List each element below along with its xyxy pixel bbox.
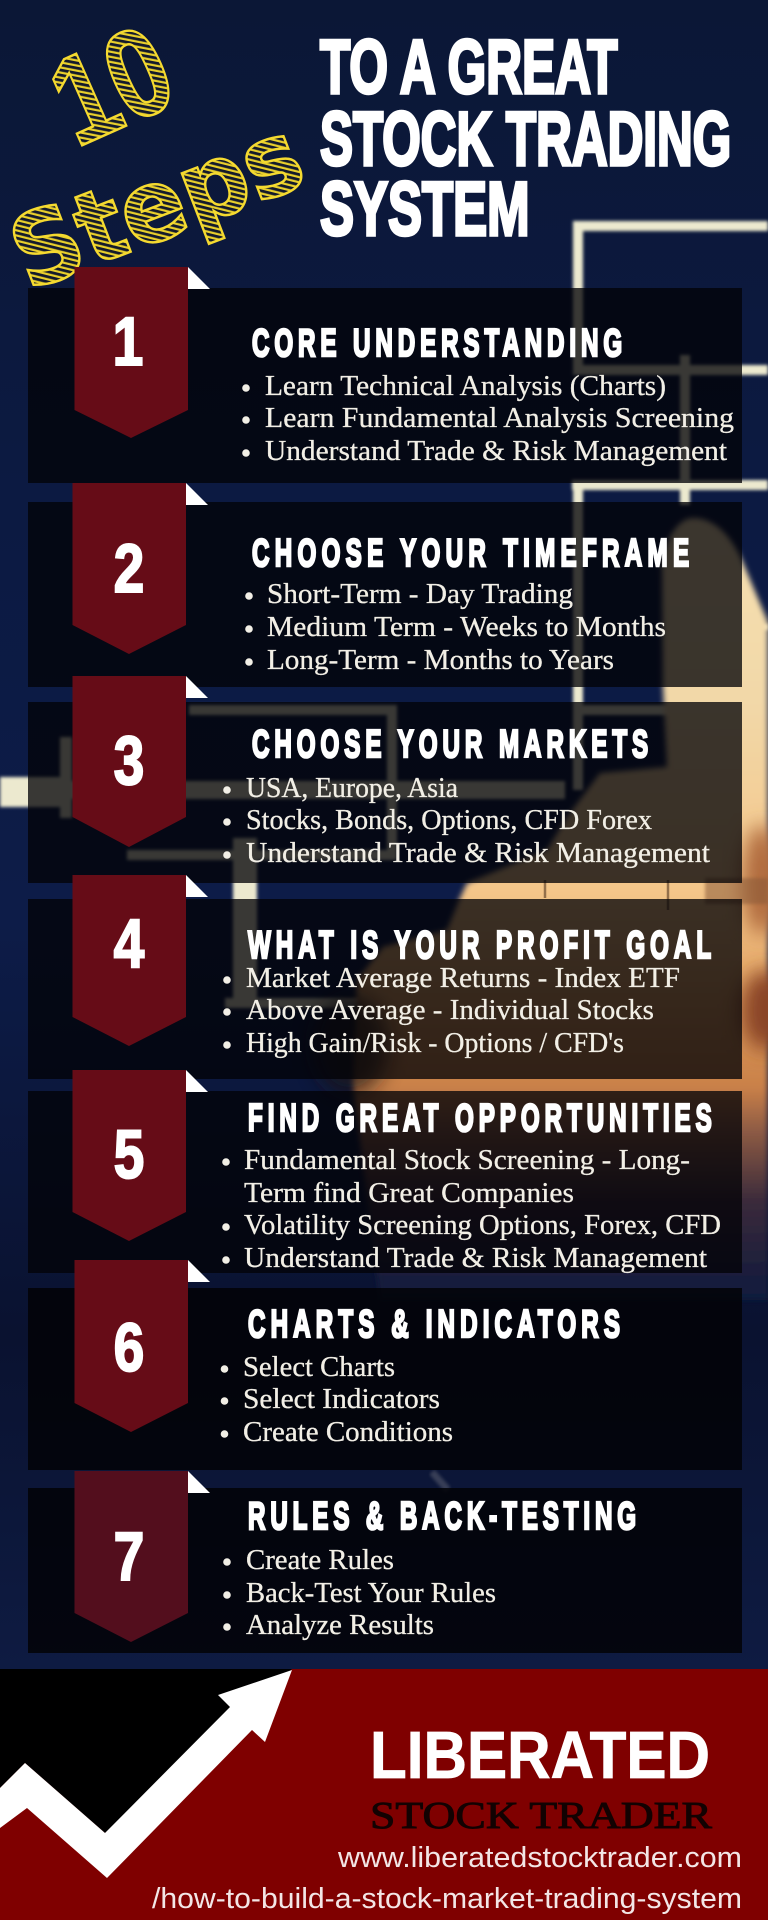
panel 1 bullet list: Understand Trade & Risk Management xyxy=(265,435,727,467)
panel: step 1 xyxy=(28,288,742,483)
panel 3 bullet list xyxy=(223,772,710,869)
panel 6 bullet list: Select Indicators xyxy=(243,1383,440,1415)
panel 1 heading: CORE UNDERSTANDING xyxy=(252,321,622,364)
panel 4 bullet list: High Gain/Risk - Options / CFD's xyxy=(246,1027,624,1059)
panel 5 bullet list: Fundamental Stock Screening - Long- xyxy=(244,1144,690,1176)
panel: step 2 xyxy=(28,502,742,687)
panel 3 bullet list: Understand Trade & Risk Management xyxy=(246,837,710,869)
title xyxy=(320,25,731,252)
panel 3 bullet list: USA, Europe, Asia xyxy=(246,772,458,804)
panel: step 4 xyxy=(28,899,742,1079)
panel 4 bullet list: Market Average Returns - Index ETF xyxy=(246,962,680,994)
panel 5 bullet list xyxy=(222,1144,721,1274)
panel 2 bullet list: Long-Term - Months to Years xyxy=(267,644,614,676)
panel 7 bullet list: Analyze Results xyxy=(246,1609,434,1641)
icon: rising white arrow xyxy=(0,1670,292,1878)
panel 2 bullet list xyxy=(245,578,666,676)
ribbon: step 4: 4 xyxy=(114,905,145,982)
hand-lettered "10 Steps": Steps xyxy=(0,96,319,313)
ribbon: step 1: 1 xyxy=(113,303,143,380)
title: SYSTEM xyxy=(320,167,530,252)
panel 5 heading: FIND GREAT OPPORTUNITIES xyxy=(248,1096,712,1139)
panel 6 bullet list: Select Charts xyxy=(243,1351,395,1383)
website URL: www.liberatedstocktrader.com xyxy=(337,1842,742,1874)
ribbon: step 2: 2 xyxy=(114,530,144,607)
panel: step 5 xyxy=(28,1091,742,1274)
ribbon: step 7: 7 xyxy=(114,1518,144,1595)
ribbon: step 7 xyxy=(74,1471,210,1642)
panel 7 bullet list: Create Rules xyxy=(246,1544,394,1576)
ribbon: step 5: 5 xyxy=(114,1116,144,1193)
hand-lettered "10 Steps" xyxy=(0,0,319,313)
panel 1 bullet list: Learn Fundamental Analysis Screening xyxy=(265,402,734,434)
panel 3 heading: CHOOSE YOUR MARKETS xyxy=(252,722,648,765)
ribbon: step 2 xyxy=(72,483,208,654)
panel: step 3 xyxy=(28,702,742,883)
logo: LIBERATED: LIBERATED xyxy=(370,1718,710,1793)
panel 4 heading: WHAT IS YOUR PROFIT GOAL xyxy=(248,923,711,966)
title: TO A GREAT xyxy=(320,25,618,110)
panel 6 bullet list xyxy=(221,1351,453,1448)
ribbon: step 3: 3 xyxy=(114,722,144,799)
panel 3 bullet list: Stocks, Bonds, Options, CFD Forex xyxy=(246,804,652,836)
panel 4 bullet list xyxy=(223,962,680,1059)
ribbon: step 6: 6 xyxy=(114,1309,144,1386)
page path URL: /how-to-build-a-stock-market-trading-system xyxy=(152,1883,742,1915)
logo: STOCK TRADER: STOCK TRADER xyxy=(370,1795,713,1837)
panel 1 bullet list xyxy=(242,370,734,467)
panel 7 bullet list xyxy=(223,1544,496,1641)
panel 2 bullet list: Medium Term - Weeks to Months xyxy=(267,611,666,643)
ribbon: step 4 xyxy=(72,875,208,1046)
panel 5 bullet list: Understand Trade & Risk Management xyxy=(244,1242,707,1274)
panel 7 bullet list: Back-Test Your Rules xyxy=(246,1577,496,1609)
panel: step 7 xyxy=(28,1488,742,1653)
footer band xyxy=(0,1669,768,1920)
ribbon: step 5 xyxy=(72,1070,208,1241)
panel 4 bullet list: Above Average - Individual Stocks xyxy=(246,994,654,1026)
panel 2 heading: CHOOSE YOUR TIMEFRAME xyxy=(252,531,689,574)
ribbon: step 6 xyxy=(74,1260,210,1432)
panel 5 bullet list: Volatility Screening Options, Forex, CFD xyxy=(244,1209,721,1241)
panel 2 bullet list: Short-Term - Day Trading xyxy=(267,578,573,610)
panel 6 bullet list: Create Conditions xyxy=(243,1416,453,1448)
ribbon: step 1 xyxy=(74,267,210,438)
ribbon: step 3 xyxy=(72,676,208,847)
panel: step 6 xyxy=(28,1288,742,1470)
panel 1 bullet list: Learn Technical Analysis (Charts) xyxy=(265,370,666,402)
panel 5 bullet list: Term find Great Companies xyxy=(244,1177,574,1209)
panel 7 heading: RULES & BACK-TESTING xyxy=(248,1494,636,1537)
panel 6 heading: CHARTS & INDICATORS xyxy=(248,1302,620,1345)
